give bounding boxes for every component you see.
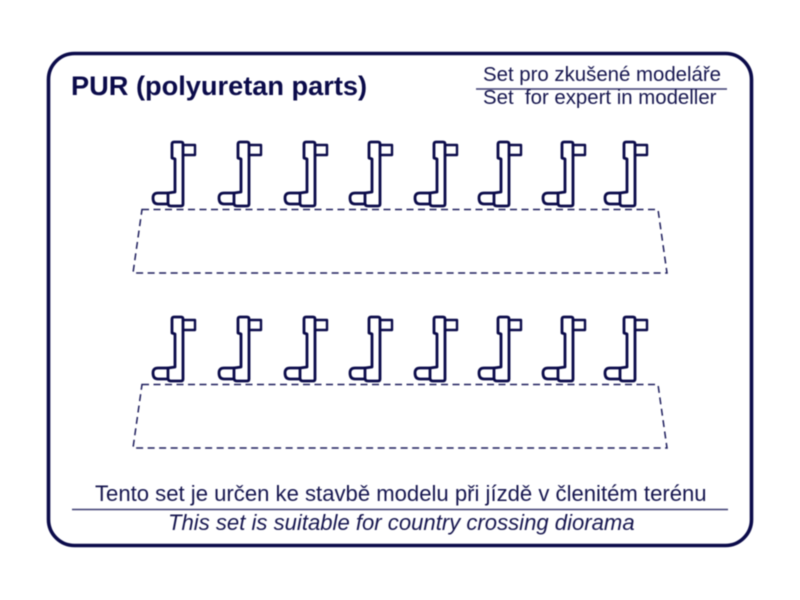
- parts row 2: [153, 317, 647, 381]
- audience note: Set for expert in modeller: [483, 87, 717, 109]
- footer note: [72, 481, 728, 535]
- title: PUR (polyuretan parts): [71, 70, 367, 101]
- dashed base 2: [133, 384, 667, 448]
- parts row 1: [153, 142, 647, 206]
- audience note: Set pro zkušené modeláře: [483, 64, 721, 86]
- dashed base 1: [133, 210, 667, 273]
- audience note: [476, 64, 727, 109]
- footer note: This set is suitable for country crossing diorama: [168, 510, 635, 535]
- footer note: Tento set je určen ke stavbě modelu při jízdě v členitém terénu: [95, 481, 707, 506]
- panel: rounded frame: [48, 54, 752, 546]
